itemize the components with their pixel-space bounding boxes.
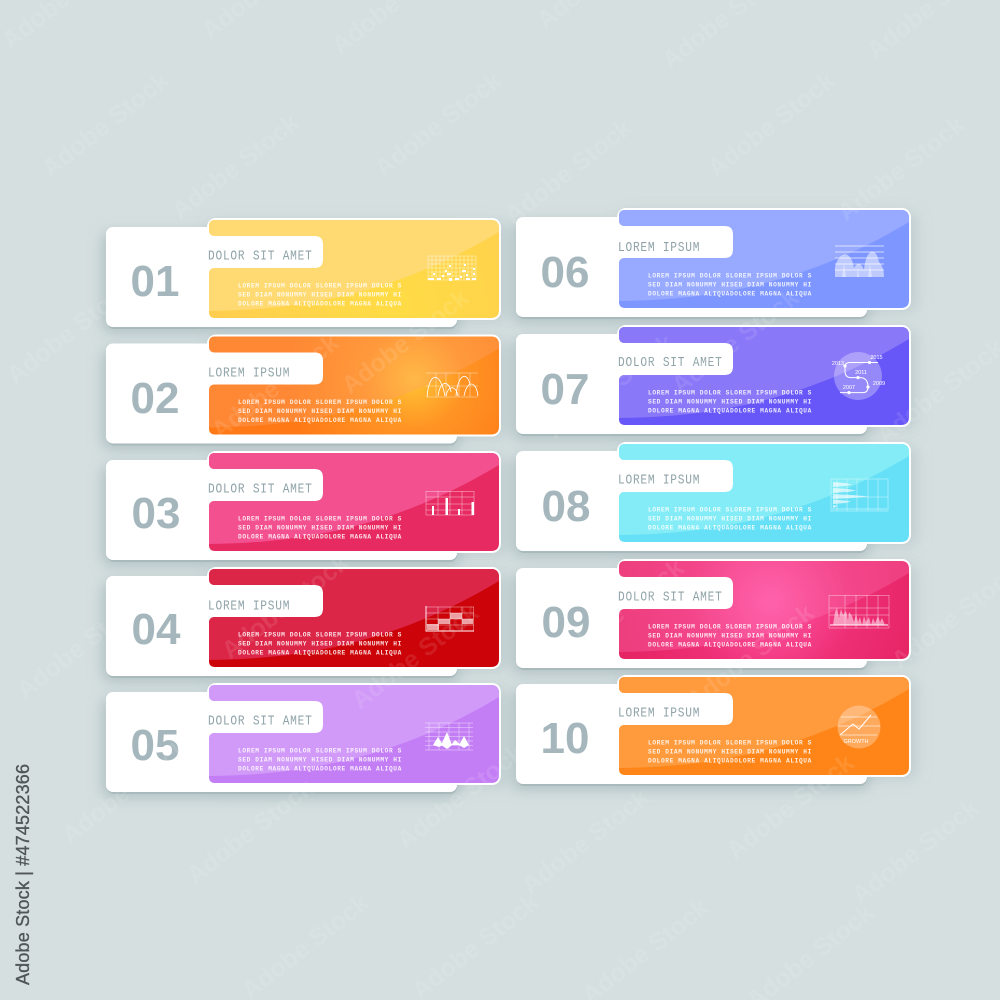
body text: LOREM IPSUM DOLOR SLOREM IPSUM DOLOR S	[648, 390, 812, 396]
body text: SED DIAM NONUMMY HISED DIAM NONUMMY HI	[238, 292, 402, 298]
number: 04	[132, 605, 181, 654]
banner 07	[512, 325, 917, 440]
icon: timeline circle: 2013	[832, 361, 844, 367]
watermark: Adobe Stock	[1, 274, 139, 390]
body text: DOLORE MAGNA ALIQUADOLORE MAGNA ALIQUA	[238, 300, 402, 308]
watermark: Adobe Stock	[721, 749, 859, 865]
icon: growth circle: GROWTH	[843, 739, 869, 745]
body text: LOREM IPSUM DOLOR SLOREM IPSUM DOLOR S	[648, 272, 812, 280]
number: 05	[131, 721, 179, 770]
body text: DOLORE MAGNA ALIQUADOLORE MAGNA ALIQUA	[238, 534, 402, 540]
heading: LOREM IPSUM	[208, 597, 290, 614]
body text: SED DIAM NONUMMY HISED DIAM NONUMMY HI	[238, 524, 402, 532]
banner 03	[102, 451, 507, 566]
banner 10	[512, 675, 917, 790]
icon: hump chart	[835, 246, 884, 277]
body text: LOREM IPSUM DOLOR SLOREM IPSUM DOLOR S	[238, 748, 402, 754]
body text: DOLORE MAGNA ALIQUADOLORE MAGNA ALIQUA	[648, 290, 812, 298]
body text: DOLORE MAGNA ALIQUADOLORE MAGNA ALIQUA	[238, 766, 402, 772]
body text: SED DIAM NONUMMY HISED DIAM NONUMMY HI	[648, 398, 812, 406]
banner 06	[512, 208, 917, 323]
body text: DOLORE MAGNA ALIQUADOLORE MAGNA ALIQUA	[648, 642, 812, 648]
heading: DOLOR SIT AMET	[618, 354, 723, 370]
heading: LOREM IPSUM	[208, 364, 290, 381]
banner 05	[102, 683, 507, 798]
body text: DOLORE MAGNA ALIQUADOLORE MAGNA ALIQUA	[648, 758, 812, 764]
body text: DOLORE MAGNA ALIQUADOLORE MAGNA ALIQUA	[648, 408, 812, 414]
body text: DOLORE MAGNA ALIQUADOLORE MAGNA ALIQUA	[238, 417, 402, 424]
stock credit: Adobe Stock | #474522366	[13, 764, 33, 985]
watermark: Adobe Stock	[336, 284, 474, 400]
watermark: Adobe Stock	[666, 284, 804, 400]
heading: DOLOR SIT AMET	[618, 588, 723, 605]
icon: grid chart	[428, 256, 476, 281]
body text: LOREM IPSUM DOLOR SLOREM IPSUM DOLOR S	[648, 506, 812, 514]
watermark: Adobe Stock	[832, 111, 970, 227]
watermark: Adobe Stock	[166, 109, 304, 225]
body text: DOLORE MAGNA ALIQUADOLORE MAGNA ALIQUA	[648, 524, 812, 532]
body text: LOREM IPSUM DOLOR SLOREM IPSUM DOLOR S	[238, 399, 402, 406]
icon: hatched step chart	[426, 606, 474, 631]
heading: LOREM IPSUM	[618, 704, 700, 721]
number: 03	[132, 489, 180, 538]
icon: triangle peak chart	[425, 723, 473, 750]
watermark: Adobe Stock	[499, 114, 637, 230]
heading: DOLOR SIT AMET	[208, 480, 313, 497]
number: 08	[542, 482, 590, 531]
watermark: Adobe Stock	[681, 599, 819, 715]
body text: LOREM IPSUM DOLOR SLOREM IPSUM DOLOR S	[648, 624, 812, 630]
watermark: Adobe Stock	[391, 739, 529, 855]
number: 10	[541, 714, 589, 763]
number: 02	[131, 374, 179, 423]
watermark: Adobe Stock	[551, 554, 689, 670]
body text: SED DIAM NONUMMY HISED DIAM NONUMMY HI	[648, 516, 812, 522]
body text: SED DIAM NONUMMY HISED DIAM NONUMMY HI	[648, 748, 812, 756]
body text: SED DIAM NONUMMY HISED DIAM NONUMMY HI	[238, 408, 402, 415]
heading: DOLOR SIT AMET	[208, 712, 313, 729]
number: 09	[542, 598, 590, 647]
icon: timeline circle: 2009	[873, 381, 885, 387]
body text: SED DIAM NONUMMY HISED DIAM NONUMMY HI	[238, 756, 402, 764]
icon: timeline circle: 2007	[843, 385, 855, 391]
banner 01	[102, 218, 507, 333]
watermark: Adobe Stock	[206, 329, 344, 445]
heading: DOLOR SIT AMET	[208, 247, 313, 264]
banner 02	[102, 334, 507, 450]
watermark: Adobe Stock	[702, 67, 840, 183]
icon: horizontal spike chart	[831, 479, 888, 511]
watermark: Adobe Stock	[846, 794, 984, 910]
body text: LOREM IPSUM DOLOR SLOREM IPSUM DOLOR S	[238, 282, 402, 290]
watermark: Adobe Stock	[181, 774, 319, 890]
icon: timeline circle: 2011	[855, 370, 867, 376]
watermark: Adobe Stock	[369, 67, 507, 183]
number: 06	[541, 248, 589, 297]
heading: LOREM IPSUM	[618, 239, 700, 255]
banner 09	[512, 559, 917, 674]
body text: LOREM IPSUM DOLOR SLOREM IPSUM DOLOR S	[648, 740, 812, 746]
icon: timeline circle: 2015	[870, 355, 883, 361]
number: 01	[131, 257, 179, 306]
icon: spike bar grid	[829, 595, 889, 628]
watermark: Adobe Stock	[516, 784, 654, 900]
watermark: Adobe Stock	[216, 549, 354, 665]
body text: SED DIAM NONUMMY HISED DIAM NONUMMY HI	[648, 632, 812, 640]
watermark: Adobe Stock	[541, 329, 679, 445]
body text: DOLORE MAGNA ALIQUADOLORE MAGNA ALIQUA	[238, 650, 402, 656]
body text: LOREM IPSUM DOLOR SLOREM IPSUM DOLOR S	[238, 516, 402, 522]
icon: growth circle	[838, 706, 880, 748]
banner 04	[102, 567, 507, 682]
banner 08	[512, 442, 917, 557]
watermark: Adobe Stock	[11, 589, 149, 705]
watermark: Adobe Stock	[36, 67, 174, 183]
body text: LOREM IPSUM DOLOR SLOREM IPSUM DOLOR S	[238, 632, 402, 638]
body text: SED DIAM NONUMMY HISED DIAM NONUMMY HI	[648, 282, 812, 288]
icon: timeline circle	[832, 352, 885, 400]
icon: arch chart	[426, 373, 478, 397]
body text: SED DIAM NONUMMY HISED DIAM NONUMMY HI	[238, 640, 402, 648]
heading: LOREM IPSUM	[618, 471, 700, 488]
watermark: Adobe Stock	[56, 734, 194, 850]
icon: bar grid	[426, 491, 474, 515]
watermark: Adobe Stock	[346, 599, 484, 715]
number: 07	[541, 365, 589, 414]
